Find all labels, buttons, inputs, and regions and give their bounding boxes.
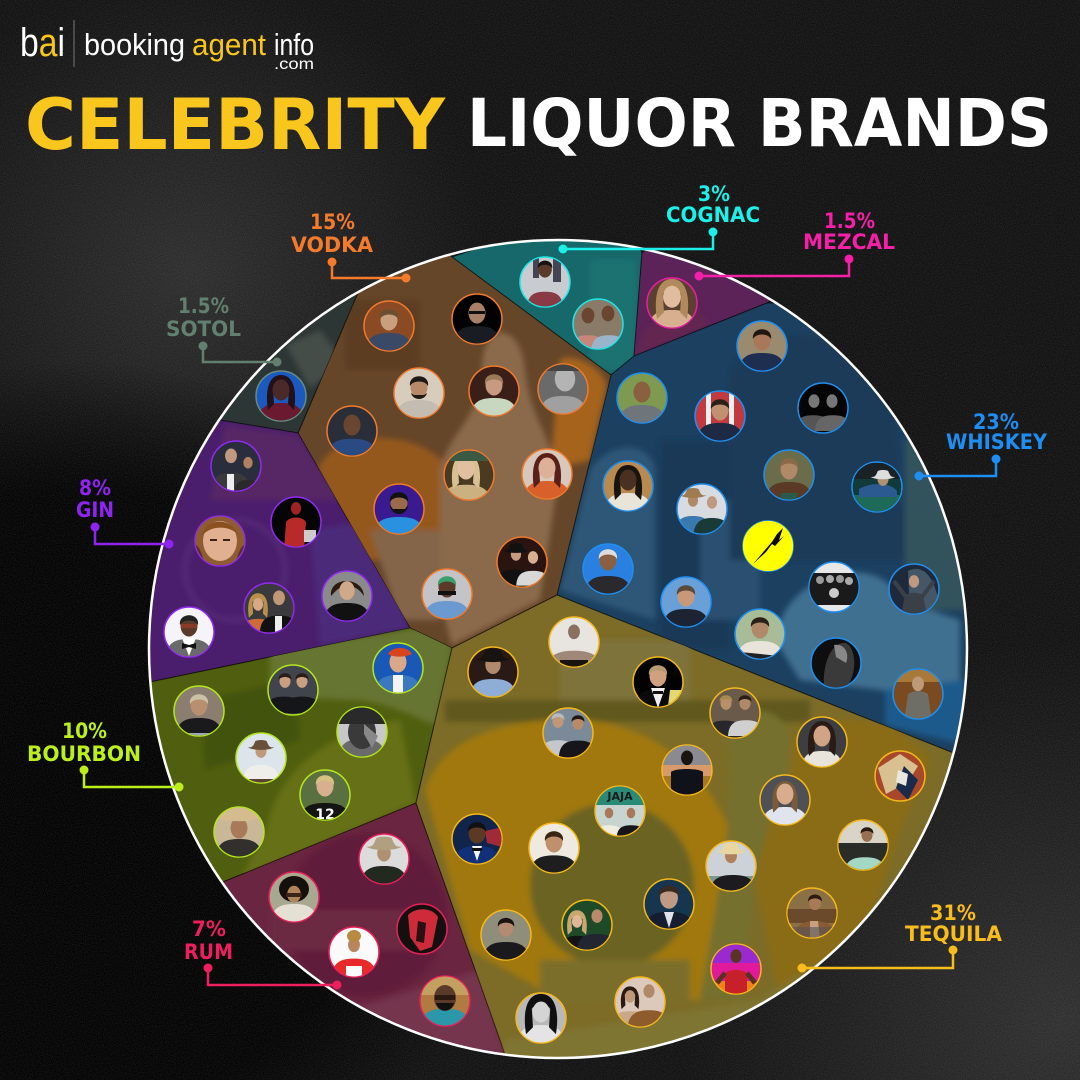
portrait: tequila 20 xyxy=(612,977,671,1029)
label: mezcal xyxy=(695,209,895,280)
portrait: gin 3 xyxy=(195,516,245,566)
portrait: whiskey 2 xyxy=(617,373,667,426)
portrait: whiskey 6 xyxy=(764,450,814,503)
portrait: rum 5 xyxy=(419,976,471,1032)
portrait: vodka 3 xyxy=(394,368,444,421)
label: bourbon: 10% xyxy=(62,719,107,743)
logo: booking agent info: .com xyxy=(274,56,314,73)
label: vodka: 15% xyxy=(310,210,355,234)
wedge: whiskey xyxy=(558,302,966,752)
portrait: whiskey 14 xyxy=(889,564,939,615)
portrait: tequila 18 xyxy=(560,900,617,952)
portrait: gin 1 xyxy=(211,441,261,494)
label: vodka xyxy=(291,210,410,282)
portrait: tequila 5 xyxy=(706,688,764,738)
portrait: tequila 17 xyxy=(481,910,531,963)
portrait: bourbon 7 xyxy=(213,802,265,860)
label: bourbon xyxy=(27,719,183,791)
portrait: cognac 1 xyxy=(520,257,570,308)
portrait: tequila 10 xyxy=(760,775,810,828)
portrait: gin 6 xyxy=(164,607,214,660)
label: whiskey: WHISKEY xyxy=(946,430,1048,454)
portrait: sotol 1 xyxy=(256,371,306,424)
portrait: cognac 2 xyxy=(570,299,627,351)
portrait: tequila 9: JAJA xyxy=(606,790,633,803)
portrait: vodka 6 xyxy=(326,406,378,462)
label: mezcal: MEZCAL xyxy=(803,230,895,254)
portrait: tequila 4 xyxy=(540,708,597,758)
segment: mezcal xyxy=(634,250,770,356)
portrait: gin 5 xyxy=(241,583,298,636)
label: vodka: VODKA xyxy=(291,233,374,257)
label: mezcal: 1.5% xyxy=(824,209,875,233)
label: cognac xyxy=(559,182,760,253)
segment: rum xyxy=(190,803,505,1080)
portrait: tequila 1 xyxy=(468,647,518,700)
wedge: mezcal xyxy=(634,250,770,356)
label: sotol: SOTOL xyxy=(166,317,241,341)
portrait: tequila 19 xyxy=(711,944,761,995)
outer ring xyxy=(149,240,967,1058)
portrait: vodka 11 xyxy=(422,569,472,622)
portrait: bourbon 6 xyxy=(297,770,353,827)
wedge: tequila xyxy=(416,595,1000,1080)
label: tequila: TEQUILA xyxy=(905,922,1003,946)
label: tequila xyxy=(798,901,1003,972)
logo: booking agent info: booking xyxy=(84,27,185,62)
portrait: whiskey 1 xyxy=(737,321,787,374)
portrait: whiskey 8 xyxy=(852,462,902,515)
title xyxy=(25,84,1052,166)
portrait: tequila 7 xyxy=(662,745,712,798)
portrait: vodka 2 xyxy=(452,294,502,347)
label: whiskey: 23% xyxy=(973,410,1019,434)
wedge: gin xyxy=(100,420,410,682)
portrait: whiskey 4 xyxy=(795,383,851,433)
segment: cognac xyxy=(452,241,642,374)
title: LIQUOR BRANDS xyxy=(467,85,1052,162)
portrait: vodka 5 xyxy=(538,364,588,417)
portrait: whiskey 12 xyxy=(735,609,785,662)
portrait: tequila 21 xyxy=(516,993,566,1046)
label: gin: 8% xyxy=(79,476,111,500)
portrait: vodka 7 xyxy=(443,449,495,501)
segment: tequila xyxy=(416,595,1000,1080)
portrait: rum 4 xyxy=(329,927,379,979)
portrait: rum 3 xyxy=(397,904,447,954)
segment: sotol xyxy=(221,294,358,433)
label: gin xyxy=(76,476,173,548)
label: rum: 7% xyxy=(192,917,226,941)
portrait: bourbon 3 xyxy=(174,686,224,739)
label: cognac: 3% xyxy=(698,182,730,206)
segment: vodka xyxy=(298,220,611,648)
portrait: tequila 16 xyxy=(787,888,837,940)
segment: whiskey xyxy=(558,302,966,752)
portrait: bourbon 2 xyxy=(265,665,321,715)
portrait: whiskey 3 xyxy=(695,391,745,444)
portrait: whiskey 5 xyxy=(603,461,653,514)
portrait: vodka 1 xyxy=(364,301,414,354)
portrait: whiskey 15 xyxy=(811,638,861,688)
logo: booking agent info: agent xyxy=(192,27,266,62)
title: CELEBRITY xyxy=(25,84,446,166)
portrait: bourbon 6: 12 xyxy=(315,807,335,823)
portrait: bourbon 4 xyxy=(337,707,387,760)
portrait: rum 2 xyxy=(269,872,319,925)
portrait: tequila 2 xyxy=(544,617,604,677)
segment: bourbon xyxy=(130,625,452,882)
portrait: tequila 6 xyxy=(797,717,847,769)
portrait: whiskey 7 xyxy=(676,483,728,535)
portrait: vodka 4 xyxy=(469,366,519,419)
portrait: tequila 11 xyxy=(452,814,502,867)
label: whiskey xyxy=(915,410,1048,480)
portrait: whiskey 10 xyxy=(583,544,633,597)
wedge: vodka xyxy=(298,220,611,648)
portrait: whiskey 13 xyxy=(809,562,859,612)
label: sotol: 1.5% xyxy=(178,294,229,318)
portrait: rum 1 xyxy=(359,834,409,887)
label: bourbon: BOURBON xyxy=(27,742,141,766)
portrait: bourbon 1 xyxy=(373,643,423,696)
portrait: bourbon 5 xyxy=(236,733,286,786)
pie chart: liquor categories xyxy=(148,238,968,1060)
label: rum xyxy=(184,917,341,989)
label: tequila: 31% xyxy=(930,901,976,925)
portrait: mezcal 1 xyxy=(647,278,697,331)
portrait: gin 2 xyxy=(271,497,321,550)
wedge: rum xyxy=(190,803,505,1080)
portrait: tequila 8 xyxy=(875,751,925,801)
portrait: tequila 9 xyxy=(595,786,645,838)
label: rum: RUM xyxy=(184,940,233,964)
logo: booking agent info xyxy=(20,20,314,73)
wedge: sotol xyxy=(221,294,358,433)
portrait: whiskey 11 xyxy=(661,577,711,630)
wedge: cognac xyxy=(452,241,642,374)
portrait: whiskey 16 xyxy=(893,669,943,722)
label: cognac: COGNAC xyxy=(666,203,760,227)
portrait: vodka 10 xyxy=(495,537,550,587)
portrait: vodka 9 xyxy=(373,483,425,535)
label: sotol xyxy=(166,294,281,366)
portrait: gin 4 xyxy=(322,571,372,624)
portrait: whiskey 9 logo xyxy=(742,520,794,572)
portrait: tequila 3 xyxy=(633,657,683,710)
logo: booking agent info: info xyxy=(274,27,314,62)
portrait: tequila 15 xyxy=(643,879,695,935)
portrait: tequila 13 xyxy=(838,820,888,876)
segment: gin xyxy=(100,420,410,682)
logo: booking agent info: bai xyxy=(20,21,65,65)
wedge: bourbon xyxy=(130,625,452,882)
portrait: tequila 14 xyxy=(706,841,757,896)
portrait: vodka 8 xyxy=(522,449,572,502)
label: gin: GIN xyxy=(76,498,114,522)
portrait: tequila 12 xyxy=(529,823,579,877)
